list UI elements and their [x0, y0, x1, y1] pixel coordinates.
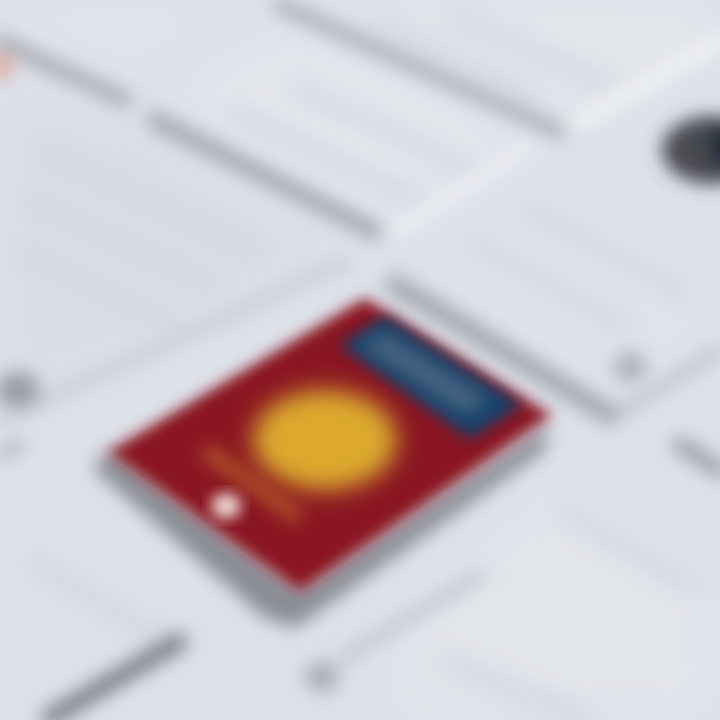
- gold lettering: [205, 450, 300, 518]
- label text band: [360, 332, 490, 415]
- passport red cover: [108, 298, 552, 592]
- dark object top right: [662, 116, 720, 184]
- white mark: [211, 493, 241, 519]
- passport blue label: [340, 316, 522, 439]
- gold emblem: [253, 390, 397, 490]
- passport: [92, 298, 552, 628]
- passport page-block shadow: [92, 425, 548, 628]
